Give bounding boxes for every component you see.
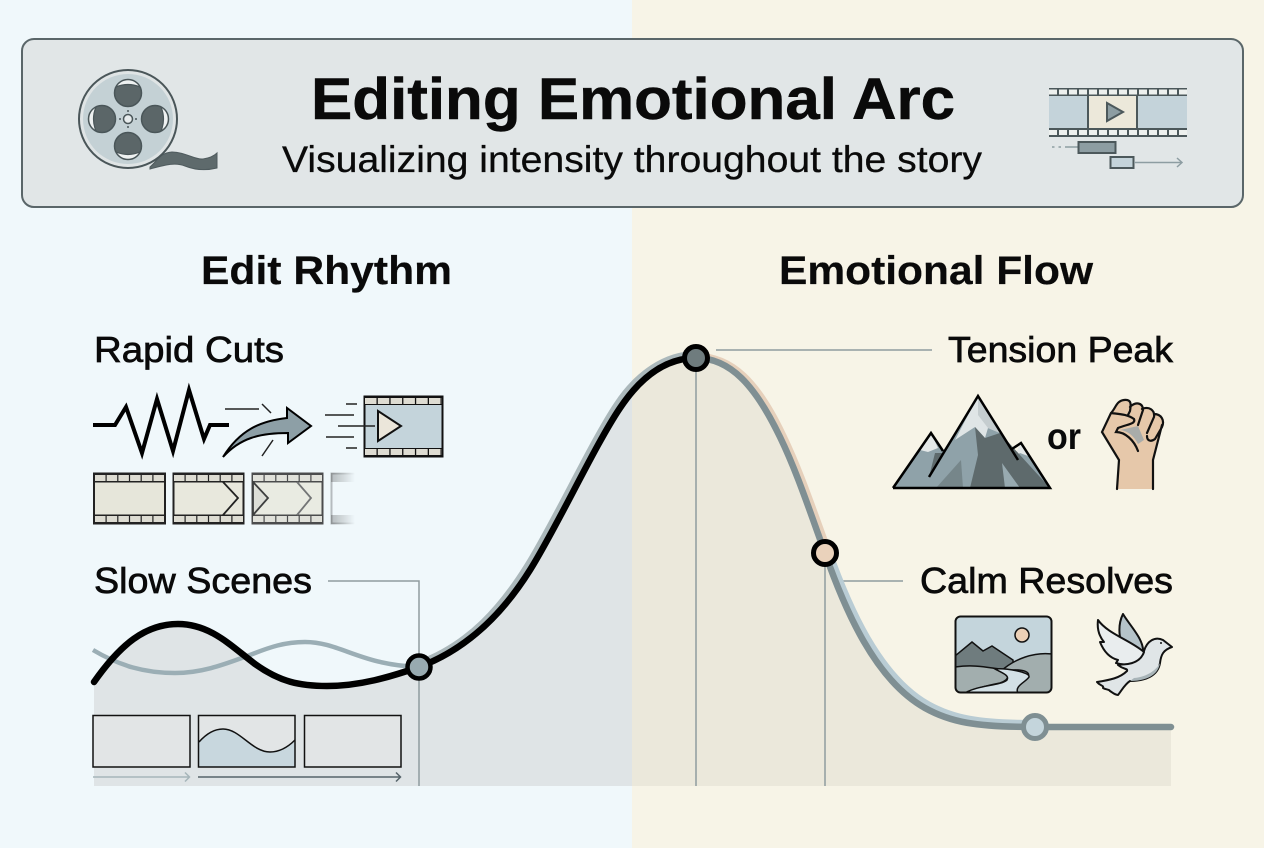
film frame 1	[94, 474, 165, 524]
film strip sequence	[94, 473, 355, 524]
icon: film frame with play button	[325, 396, 442, 456]
icon: jagged rhythm line	[93, 390, 229, 453]
slow frame 3	[304, 716, 401, 767]
label: calm resolves: Calm Resolves	[920, 560, 1173, 601]
icon: landscape picture	[955, 616, 1052, 693]
title: Editing Emotional Arc	[311, 67, 955, 132]
falling curve blue highlight	[829, 551, 1035, 723]
short timeline arrow	[93, 772, 190, 782]
slow frame 1	[93, 716, 190, 767]
guide line: tension peak	[696, 350, 932, 786]
label: slow scenes: Slow Scenes	[94, 560, 312, 601]
chart: emotional arc	[93, 346, 1171, 786]
banner box	[22, 39, 1243, 207]
subtitle: Visualizing intensity throughout the story	[282, 139, 983, 180]
label: tension peak: Tension Peak	[948, 329, 1174, 370]
panel: left background	[0, 0, 632, 848]
icon: film reel	[79, 70, 217, 170]
heading: emotional flow: Emotional Flow	[779, 249, 1094, 293]
falling curve	[696, 358, 1171, 727]
panel: right background	[632, 0, 1264, 848]
text: or: or	[1047, 416, 1081, 457]
heading: edit rhythm: Edit Rhythm	[201, 249, 452, 293]
node: end of arc	[1024, 716, 1046, 738]
icon: dove	[1097, 614, 1172, 695]
film frame 4 fading	[331, 473, 355, 524]
guide line: slow scenes	[328, 581, 419, 786]
guide line: calm resolves	[825, 553, 903, 786]
slow-scene secondary wave	[93, 642, 419, 673]
area under curve, left tint	[94, 392, 632, 786]
node: slow scenes	[408, 656, 430, 678]
node: calm resolves	[814, 542, 836, 564]
slow frame 2 with wave	[198, 716, 295, 767]
slow scene frames	[93, 716, 401, 782]
node: tension peak	[684, 346, 708, 370]
icon: raised fist	[1102, 400, 1163, 489]
icon: swoosh arrow	[223, 404, 311, 457]
icon: film strip timeline	[1049, 88, 1187, 168]
long timeline arrow	[198, 772, 400, 782]
label: rapid cuts: Rapid Cuts	[94, 329, 284, 370]
rising curve highlight	[419, 354, 696, 663]
falling curve peach highlight	[696, 355, 829, 550]
header banner	[22, 39, 1243, 207]
rising curve	[94, 358, 696, 686]
film frame 2	[174, 474, 244, 524]
icon: mountain	[893, 396, 1050, 488]
area under curve, right tint	[632, 358, 1171, 786]
film frame 3	[252, 474, 322, 524]
